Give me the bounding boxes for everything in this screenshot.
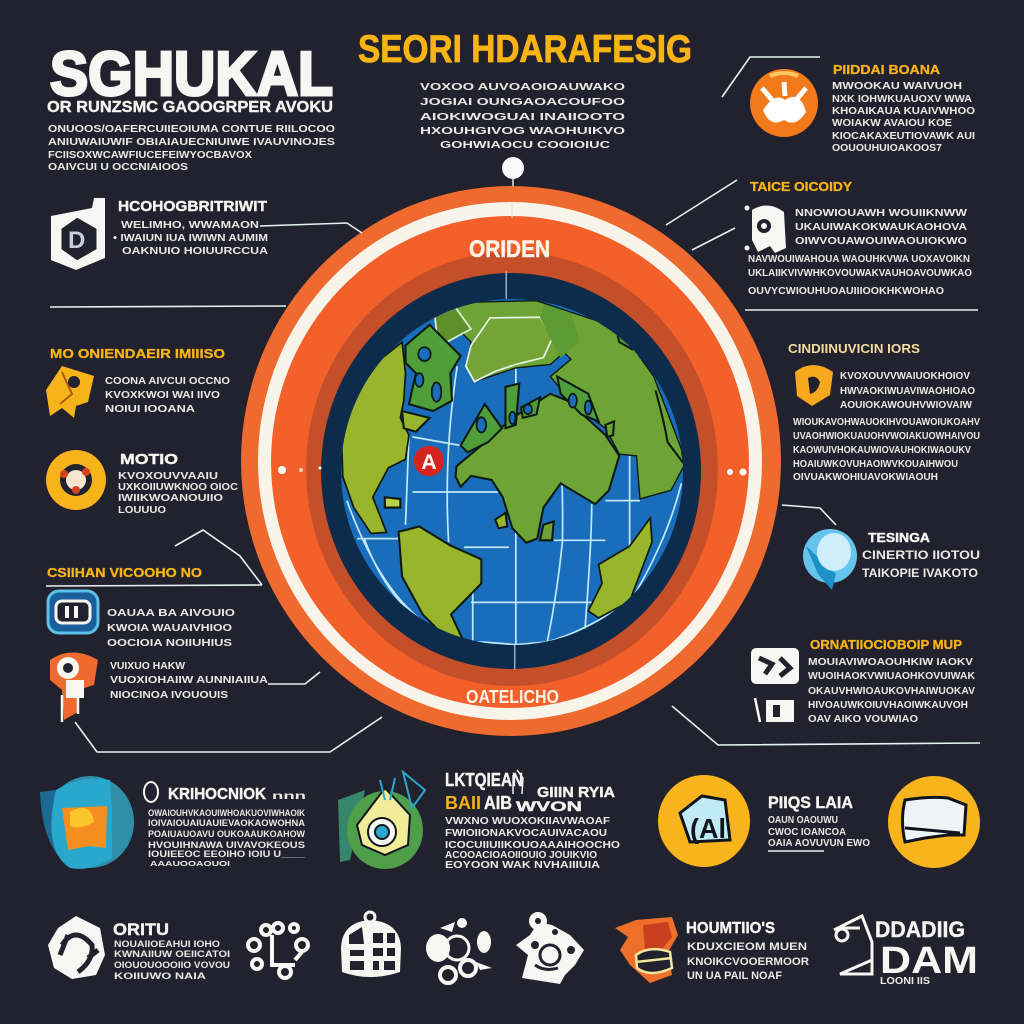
text: OIOUOUOOOIIO VOVOU xyxy=(114,960,230,971)
panel: bottom blue item xyxy=(40,776,306,869)
text xyxy=(862,548,980,580)
continent central xyxy=(456,394,619,543)
text: • IWAIUN IUA IWIWN AUMIM xyxy=(113,232,268,244)
heading: TESINGA xyxy=(868,530,931,545)
panel: right three xyxy=(788,341,980,483)
navy band xyxy=(321,273,701,669)
heading: MOTIO xyxy=(120,451,178,468)
text: OWAIOUHVKAOUIWHOAKUOVIWHAOIK xyxy=(148,808,305,818)
text: CWOC IOANCOA xyxy=(768,826,846,838)
text: EOYOON WAK NVHAIIIUIA xyxy=(445,859,600,871)
top centre text: GOHWIAOCU COOIOIUC xyxy=(440,139,611,151)
text: KWOIA WAUAIVHIOO xyxy=(107,622,232,634)
text: UKAUIWAKOKWAUKAOHOVA xyxy=(795,221,967,233)
map marker: A xyxy=(421,450,437,474)
icon: number two mark xyxy=(834,916,872,974)
text: OKAUVHWIOAUKOVHAIWUOKAV xyxy=(808,685,975,697)
icon: orange bee xyxy=(615,917,678,983)
text xyxy=(445,815,620,871)
text xyxy=(148,808,306,868)
top centre text xyxy=(420,81,625,151)
panel: right five xyxy=(672,637,980,745)
heading: KRIHOCNIOK xyxy=(168,786,266,803)
text: WIOUKAVOHWAUOKIHVOUAWOIUKOAHV xyxy=(793,416,980,428)
icon: blue device xyxy=(48,591,98,633)
text: VUIXUO HAKW xyxy=(110,660,185,672)
ring label bottom: OATELICHO xyxy=(466,687,559,707)
text: UN UA PAIL NOAF xyxy=(687,970,782,982)
connector xyxy=(722,57,820,97)
text: CINERTIO IIOTOU xyxy=(862,548,980,562)
text xyxy=(748,207,972,297)
text: OAV AIKO VOUWIAO xyxy=(808,713,918,725)
heading: CSIIHAN VICOOHO NO xyxy=(47,565,202,580)
heading: PIIQS LAIA xyxy=(768,793,853,812)
intro text: OAIVCUI U OCCNIAIOOS xyxy=(48,161,188,173)
heading: GIIIN RYIA xyxy=(537,784,615,801)
top centre text: JOGIAI OUNGAOACOUFOO xyxy=(420,96,625,108)
icon: yellow circle with blue badge: (Al xyxy=(690,813,726,844)
text: MOUIAVIWOAOUHKIW IAOKV xyxy=(808,656,973,668)
text xyxy=(808,656,975,725)
text: NXK IOHWKUAUOXV WWA xyxy=(832,93,972,105)
graticule xyxy=(346,366,682,646)
continent south xyxy=(399,527,481,646)
text: OAUAA BA AIVOUIO xyxy=(107,607,235,619)
text: NIOCINOA IVOUOUIS xyxy=(110,689,228,701)
heading: HOUMTIIO'S xyxy=(686,920,775,937)
top centre heading: SEORI HDARAFESIG xyxy=(358,28,692,71)
text: WUOIHAOKVWIUAOHKOVUIWAK xyxy=(808,670,975,682)
dark orange band xyxy=(306,252,718,686)
text xyxy=(832,80,975,154)
icon: yellow circle with blue badge xyxy=(658,775,750,867)
text xyxy=(113,219,268,257)
text: LOUUUO xyxy=(118,504,166,516)
panel: right four xyxy=(782,505,980,590)
island fragments xyxy=(415,347,592,432)
text: HVOUIHNAWA UIVAVOKEOUS xyxy=(148,840,305,850)
text: KWNAIIUW OEIICATOI xyxy=(114,949,230,960)
connector xyxy=(260,223,362,233)
heading: WVON xyxy=(516,798,582,814)
text: TAIKOPIE IVAKOTO xyxy=(862,566,978,580)
white ring xyxy=(258,202,762,720)
connector xyxy=(268,672,320,684)
text: VUOXIOHAIIW AUNNIAIIUA xyxy=(110,674,268,686)
panel: left item two xyxy=(46,450,238,516)
intro text: ONUOOS/OAFERCUIIEOIUMA CONTUE RIILOCOO xyxy=(48,123,335,135)
text: AOUIOKAWOUHVWIOVAIW xyxy=(840,399,972,411)
text: KVOXKWOI WAI IIVO xyxy=(105,389,220,401)
text: OAKNUIO HOIUURCCUA xyxy=(122,245,268,257)
top pin dot xyxy=(502,157,524,188)
large label: DAM xyxy=(880,940,978,982)
text: KVOXOUVVAAIU xyxy=(118,470,218,482)
globe xyxy=(341,271,684,670)
heading: ORITU xyxy=(113,920,169,939)
title block xyxy=(47,40,335,173)
panel: bottom icon row xyxy=(48,912,978,987)
text: HWVAOKIWUAVIWAOHIOAO xyxy=(840,385,975,397)
ring label top: ORIDEN xyxy=(469,236,550,263)
text: KNOIKCVOOERMOOR xyxy=(687,956,809,968)
text: POAIUAUOAVU OUKOAAUKOAHOW xyxy=(148,829,305,839)
panel: left item one xyxy=(46,346,230,418)
text: HOAIUWKOVUHAOIWVKOUAIHWOU xyxy=(793,458,958,470)
text: OUVYCWIOUHUOAUIIIOOKHKWOHAO xyxy=(748,285,944,297)
text: FWIOIIONAKVOCAUIVACAOU xyxy=(445,827,607,839)
text: OOCIOIA NOIIUHIUS xyxy=(107,637,232,649)
arctic patches xyxy=(435,308,471,342)
heading: ORNATIIOCIOBOIP MUP xyxy=(810,637,962,652)
panel: hexagon note xyxy=(51,198,362,270)
top centre text: VOXOO AUVOAOIOAUWAKO xyxy=(420,81,625,93)
text: IWIIKWOANOUIIO xyxy=(118,492,223,504)
icon: yellow pin xyxy=(795,365,833,406)
text: KVOXOUVVWAIUOKHOIOV xyxy=(840,370,970,382)
intro text xyxy=(48,123,335,173)
central ring and globe xyxy=(241,186,781,736)
icon: hexagon badge xyxy=(51,198,105,270)
icon: green spiral xyxy=(338,772,425,869)
island clusters xyxy=(385,325,631,540)
text: KHOAIKAUA KUAIVWHOO xyxy=(832,105,975,117)
text xyxy=(118,470,238,516)
icon: white grid dome xyxy=(341,912,401,977)
icon: white head xyxy=(744,205,786,253)
heading: BAII xyxy=(445,793,481,813)
connectors xyxy=(666,180,737,250)
heading xyxy=(445,770,615,814)
panel: top right xyxy=(722,57,975,154)
top centre text: HXOUHGIVOG WAOHUIKVO xyxy=(420,125,625,137)
text: HIVOAUWKOIUVHAOIWKAUVOH xyxy=(808,699,968,711)
icon: yellow flag xyxy=(46,366,94,418)
map marker xyxy=(414,446,444,476)
text xyxy=(687,941,809,982)
text: UKLAIIKVIVWHKOVOUWAKVAUHOAVOUWKAO xyxy=(748,267,972,279)
text: KIOCAKAXEUTIOVAWK AUI xyxy=(832,130,975,142)
inner orange ring xyxy=(271,216,749,708)
connector xyxy=(672,706,980,745)
intro text: ANIUWAIUWIF OBIAIAUECNIUIWE IVAUVINOJES xyxy=(48,136,335,148)
text: OIWVOUAWOUIWAOUIOKWO xyxy=(795,235,967,247)
heading: nnn xyxy=(272,790,306,802)
text: KAOWUIVHOKAUWIOVAUHOKIWAOUKV xyxy=(793,444,971,456)
text: OOUOUHUIOAKOOS7 xyxy=(832,142,942,154)
text: KDUXCIEOM MUEN xyxy=(687,941,807,953)
icon: blue bubble xyxy=(803,529,857,590)
connector xyxy=(782,505,836,525)
heading: AIB xyxy=(484,793,512,813)
icon: yellow circle xyxy=(46,450,106,510)
text: UVAOHWIOKUAUOHVWOIAKUOWHAIVOU xyxy=(793,430,980,442)
heading: HCOHOGBRITRIWIT xyxy=(118,198,267,215)
icon: flame knot xyxy=(48,916,105,979)
icon: circuit xyxy=(248,923,308,978)
text xyxy=(110,660,268,701)
text: ICOCUIIUIIKOUOAAAIHOOCHO xyxy=(445,839,620,851)
icon: molecule xyxy=(426,918,492,983)
heading: PIIDDAI BOANA xyxy=(833,62,941,77)
text xyxy=(768,814,870,851)
heading: TAICE OICOIDY xyxy=(750,179,852,194)
text: ACOOACIOAOIIOUIO JOUIKVIO xyxy=(445,849,597,861)
panel: bottom green item xyxy=(338,770,620,871)
heading: LKTQIEAN xyxy=(445,770,523,790)
subtitle: OR RUNZSMC GAOOGRPER AVOKU xyxy=(47,99,333,116)
icon: yellow circle with folder xyxy=(888,776,980,868)
text: IOIVAIOUAIUAUIEVAOKAOWOHNA xyxy=(148,818,306,828)
heading: MO ONIENDAEIR IMIIISO xyxy=(50,346,225,361)
text: OAUN OAOUWU xyxy=(768,814,838,826)
text: MWOOKAU WAIVUOH xyxy=(832,80,962,92)
text xyxy=(114,939,230,982)
heading: CINDIINUVICIN IORS xyxy=(788,341,920,356)
text: IOUIEEOC EEOIHO IOIU U____ xyxy=(148,849,306,859)
intro text: FCIISOXWCAWFIUCEFEIWYOCBAVOX xyxy=(48,149,252,161)
connector xyxy=(75,717,382,752)
text: WELIMHO, WWAMAON xyxy=(121,219,259,231)
text: VWXNO WUOXOKIIAVWAOAF xyxy=(445,815,611,827)
text: NNOWIOUAWH WOUIIKNWW xyxy=(795,207,967,219)
text: WOIAKW AVAIOU KOE xyxy=(832,117,952,129)
top centre text: AIOKIWOGUAI INAIIOOTO xyxy=(420,111,625,123)
connector xyxy=(175,530,262,585)
continent left xyxy=(342,342,409,533)
outer orange ring xyxy=(241,186,781,736)
continent south-east xyxy=(588,518,652,618)
icon: white glyphs xyxy=(751,648,799,722)
heading xyxy=(144,782,306,803)
text: AAAUOOAOUOI xyxy=(150,861,230,868)
icon: teal shield xyxy=(40,776,134,869)
text xyxy=(793,370,980,483)
text: NOUAIIOEAHUI IOHO xyxy=(114,939,220,950)
panel: left item four xyxy=(50,652,382,752)
text: COONA AIVCUI OCCNO xyxy=(105,375,230,387)
panel: right two xyxy=(666,179,978,310)
divider left xyxy=(50,306,286,307)
divider xyxy=(745,309,978,311)
small label: LOONI IIS xyxy=(880,975,930,987)
text: OIVUAKWOHIUAVOKWIAOUH xyxy=(793,471,938,483)
icon: hexagon badge: D xyxy=(68,227,85,254)
heading: DDADIIG xyxy=(875,917,965,942)
icon: cell cluster xyxy=(516,912,584,984)
icon: orange eye xyxy=(50,652,98,722)
divider xyxy=(46,585,262,586)
ring dots xyxy=(278,466,746,476)
top centre heading xyxy=(358,28,692,151)
text: KOIIUWO NAIA xyxy=(114,971,206,982)
title: SGHUKAL xyxy=(50,40,333,109)
panel: bottom yellow item xyxy=(658,775,980,868)
text: NOIUI IOOANA xyxy=(105,403,195,415)
continent north xyxy=(447,301,684,499)
panel: left item three xyxy=(46,530,262,649)
text: NAVWOUIWAHOUA WAOUHKVWA UOXAVOIKN xyxy=(748,253,970,265)
text xyxy=(107,607,235,649)
icon: orange paw xyxy=(750,69,818,137)
text: OAIA AOVUVUN EWO xyxy=(768,837,870,849)
text xyxy=(105,375,230,415)
text: UXKOIIUWKNOO OIOC xyxy=(118,481,238,493)
